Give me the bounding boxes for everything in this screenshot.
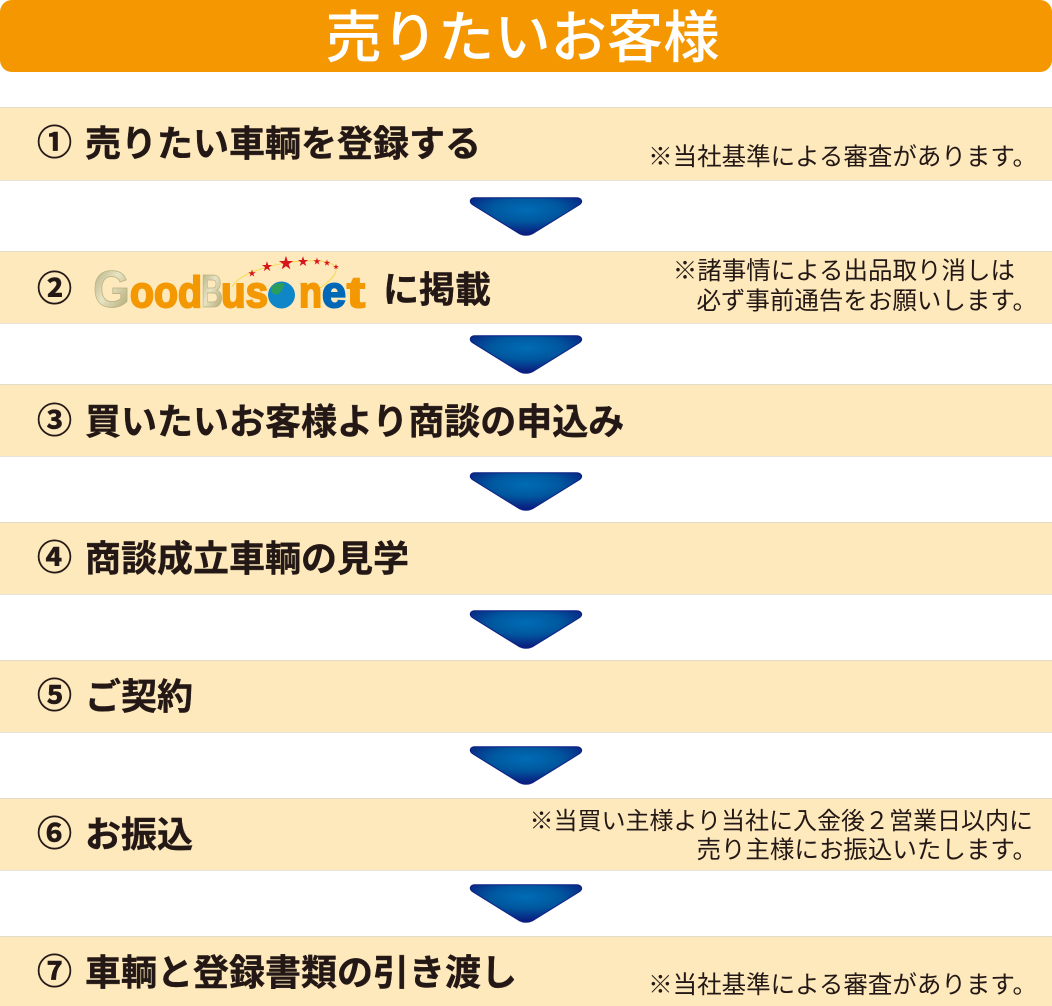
logo: GoodBus.net: ★: [298, 256, 308, 268]
step 6 note: [529, 808, 1037, 864]
step 5 heading: ご契約: [85, 676, 193, 716]
step 3 band: [0, 384, 1052, 456]
arrow 5: [470, 746, 582, 785]
step 5 number: ⑤: [37, 676, 72, 716]
step 6 note: 売り主様にお振込いたします。: [696, 837, 1037, 864]
step 4 heading: 商談成立車輌の見学: [85, 538, 409, 578]
step 6 band: [0, 798, 1052, 870]
logo: GoodBus.net: ★: [262, 261, 272, 273]
title banner: 売りたいお客様: [325, 6, 720, 69]
step 2 heading: に掲載: [383, 269, 491, 310]
step 6 number: ⑥: [37, 814, 72, 854]
logo: GoodBus.net: [93, 255, 366, 313]
step 5 band: [0, 660, 1052, 732]
step 6 note: ※当買い主様より当社に入金後２営業日以内に: [529, 808, 1033, 835]
logo: GoodBus.net: ★: [333, 264, 339, 271]
logo: GoodBus.net: ★: [324, 259, 330, 267]
step 3 heading: 買いたいお客様より商談の申込み: [85, 400, 624, 442]
step 4 band: [0, 522, 1052, 594]
step 3 number: ③: [37, 402, 72, 440]
step 2 number: ②: [37, 270, 72, 308]
title banner: [0, 0, 1052, 72]
step 1 note: ※当社基準による審査があります。: [648, 144, 1037, 171]
step 2 note: 必ず事前通告をお願いします。: [696, 288, 1037, 315]
step 4 number: ④: [37, 538, 72, 578]
logo: GoodBus.net: ★: [313, 257, 321, 266]
step 2 note: [673, 258, 1037, 315]
step 1 heading: 売りたい車輌を登録する: [85, 122, 481, 164]
step 1 number: ①: [37, 124, 72, 162]
step 7 band: [0, 936, 1052, 1006]
step 7 heading: 車輌と登録書類の引き渡し: [85, 952, 517, 992]
step 6 heading: お振込: [85, 814, 193, 854]
arrow 6: [470, 884, 582, 923]
step 1 band: [0, 107, 1052, 180]
arrow 2: [470, 335, 582, 374]
step 2 band: [0, 251, 1052, 323]
step 7 number: ⑦: [37, 952, 72, 992]
arrow 1: [470, 197, 582, 236]
arrow 3: [470, 472, 582, 511]
step 7 note: ※当社基準による審査があります。: [648, 972, 1037, 999]
logo: GoodBus.net: ★: [248, 269, 256, 278]
arrow 4: [470, 610, 582, 649]
step 2 note: ※諸事情による出品取り消しは: [673, 258, 1015, 285]
logo: GoodBus.net: ★: [278, 255, 294, 272]
